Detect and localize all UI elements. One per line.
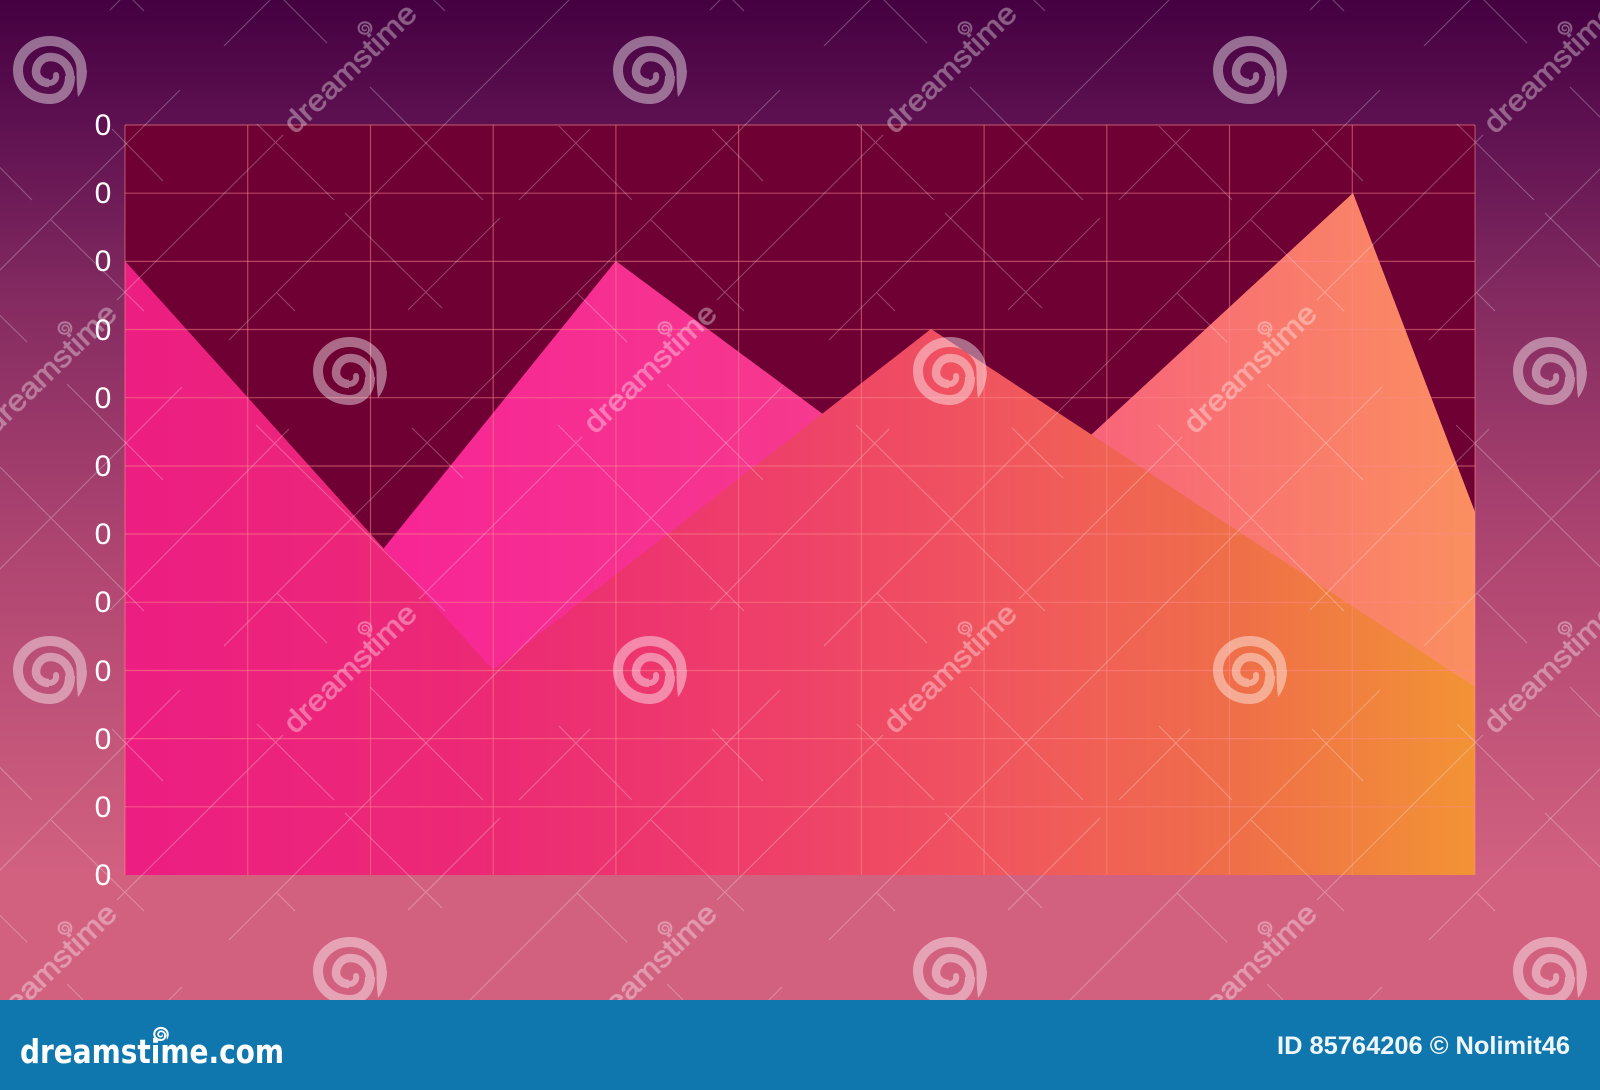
y-axis labels bbox=[95, 109, 111, 892]
plot background panel bbox=[125, 125, 1475, 875]
y-axis labels: 0 bbox=[95, 518, 111, 551]
y-axis labels: 0 bbox=[95, 177, 111, 210]
y-axis labels: 0 bbox=[95, 791, 111, 824]
y-axis labels: 0 bbox=[95, 586, 111, 619]
watermark text: dreamstime bbox=[277, 0, 424, 140]
watermark text: dreamstime bbox=[1177, 297, 1324, 440]
watermark text: dreamstime bbox=[277, 597, 424, 740]
watermark text: dreamstime bbox=[577, 897, 724, 1040]
chart: layered area chart bbox=[95, 109, 1475, 892]
footer logo text: dreamstime.com bbox=[20, 1032, 284, 1071]
rear area series bbox=[384, 193, 1475, 875]
y-axis labels: 0 bbox=[95, 245, 111, 278]
y-axis labels: 0 bbox=[95, 723, 111, 756]
watermark small registered spirals bbox=[59, 22, 1572, 934]
icon: footer logo spiral bbox=[154, 1028, 169, 1040]
y-axis labels: 0 bbox=[95, 859, 111, 892]
y-axis labels: 0 bbox=[95, 655, 111, 688]
watermark text: dreamstime bbox=[877, 0, 1024, 140]
watermark text: dreamstime bbox=[877, 597, 1024, 740]
watermark text: dreamstime bbox=[577, 297, 724, 440]
y-axis labels: 0 bbox=[95, 314, 111, 347]
front area series bbox=[125, 261, 1475, 875]
y-axis labels: 0 bbox=[95, 109, 111, 142]
y-axis labels: 0 bbox=[95, 382, 111, 415]
footer image credit: ID 85764206 © Nolimit46 bbox=[1277, 1032, 1570, 1060]
watermark text: dreamstime bbox=[1177, 897, 1324, 1040]
footer bar bbox=[0, 1000, 1600, 1090]
y-axis labels: 0 bbox=[95, 450, 111, 483]
